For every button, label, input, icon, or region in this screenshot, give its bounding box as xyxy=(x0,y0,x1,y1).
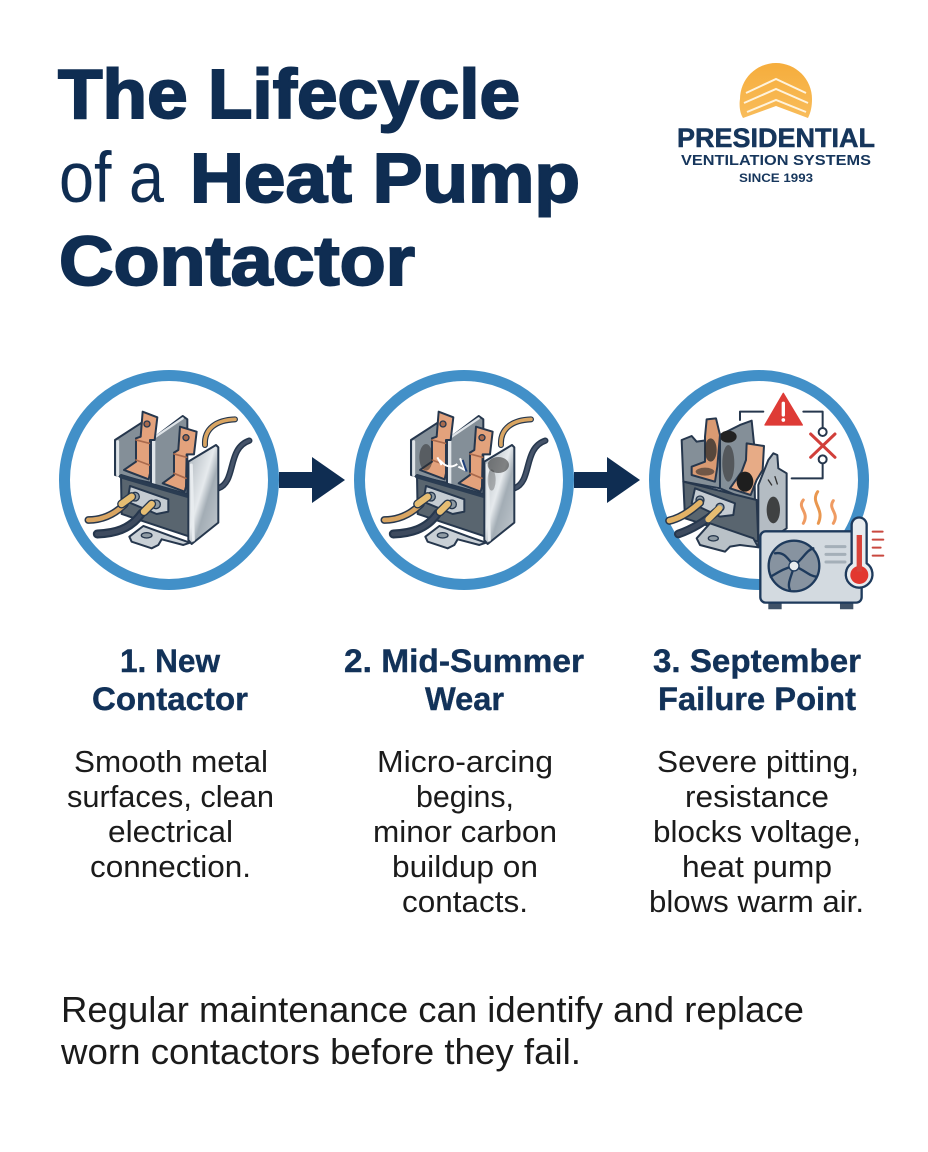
heading: step 2: Wear xyxy=(425,681,504,717)
text: step 2 description: buildup on xyxy=(392,849,538,884)
icon: new contactor xyxy=(88,412,249,548)
text: step 3 description: Severe pitting, xyxy=(657,744,859,779)
panel: step 2 mid-summer wear xyxy=(344,376,584,919)
icon: sun with roof chevrons xyxy=(740,63,812,118)
title: Heat Pump xyxy=(190,139,580,217)
text: step 3 description: heat pump xyxy=(682,849,832,884)
text: step 2 description xyxy=(373,744,557,919)
title: Contactor xyxy=(59,222,415,300)
logo: Presidential Ventilation Systems xyxy=(677,63,875,185)
logo: Presidential Ventilation Systems: VENTILATION SYSTEMS xyxy=(681,153,871,169)
title: of a xyxy=(59,139,164,218)
logo: Presidential Ventilation Systems: SINCE 1993 xyxy=(739,171,813,185)
panel: step 3 september failure point xyxy=(649,376,883,919)
text: step 1 description: Smooth metal xyxy=(74,744,268,779)
icon: heat waves xyxy=(801,492,835,523)
icon ring: step 2 xyxy=(360,376,568,584)
text: step 1 description xyxy=(67,744,274,884)
logo: Presidential Ventilation Systems: PRESIDENTIAL xyxy=(677,123,875,153)
text: closing maintenance note: worn contactors before they fail. xyxy=(60,1031,581,1072)
heading: step 1 xyxy=(92,643,248,717)
text: step 2 description: minor carbon xyxy=(373,814,557,849)
heading: step 3 xyxy=(653,643,861,717)
heading: step 3: Failure Point xyxy=(658,681,856,717)
text: step 1 description: connection. xyxy=(90,849,251,884)
text: step 2 description: Micro-arcing xyxy=(377,744,553,779)
icon: hot thermometer xyxy=(846,517,883,588)
panel: step 1 new contactor xyxy=(64,376,274,884)
icon: burnt contactor, warning circuit and overheating heat pump xyxy=(669,393,883,609)
arrow: step 2 to step 3 xyxy=(574,457,640,503)
icon: open circuit with warning xyxy=(740,393,835,478)
text: step 1 description: surfaces, clean xyxy=(67,779,274,814)
text: step 1 description: electrical xyxy=(108,814,233,849)
icon: burnt contactor xyxy=(669,418,787,552)
text: step 3 description: blocks voltage, xyxy=(653,814,861,849)
icon: worn contactor with sparks and soot xyxy=(384,412,545,548)
icon ring: step 3 xyxy=(654,376,864,584)
icon ring: step 1 xyxy=(64,376,274,584)
heading: step 3: 3. September xyxy=(653,643,861,679)
heading: step 2: 2. Mid-Summer xyxy=(344,643,584,679)
heading: step 2 xyxy=(344,643,584,717)
text: closing maintenance note: Regular maintenance can identify and replace xyxy=(61,989,804,1030)
text: closing maintenance note xyxy=(60,989,804,1072)
heading: step 1: Contactor xyxy=(92,681,248,717)
title xyxy=(58,55,580,300)
heading: step 1: 1. New xyxy=(120,643,221,679)
text: step 3 description: blows warm air. xyxy=(649,884,864,919)
title: The Lifecycle xyxy=(58,55,520,133)
text: step 3 description: resistance xyxy=(685,779,829,814)
text: step 3 description xyxy=(649,744,864,919)
text: step 2 description: begins, xyxy=(416,779,514,814)
icon: outdoor heat pump unit xyxy=(760,531,862,609)
text: step 2 description: contacts. xyxy=(402,884,528,919)
arrow: step 1 to step 2 xyxy=(279,457,345,503)
